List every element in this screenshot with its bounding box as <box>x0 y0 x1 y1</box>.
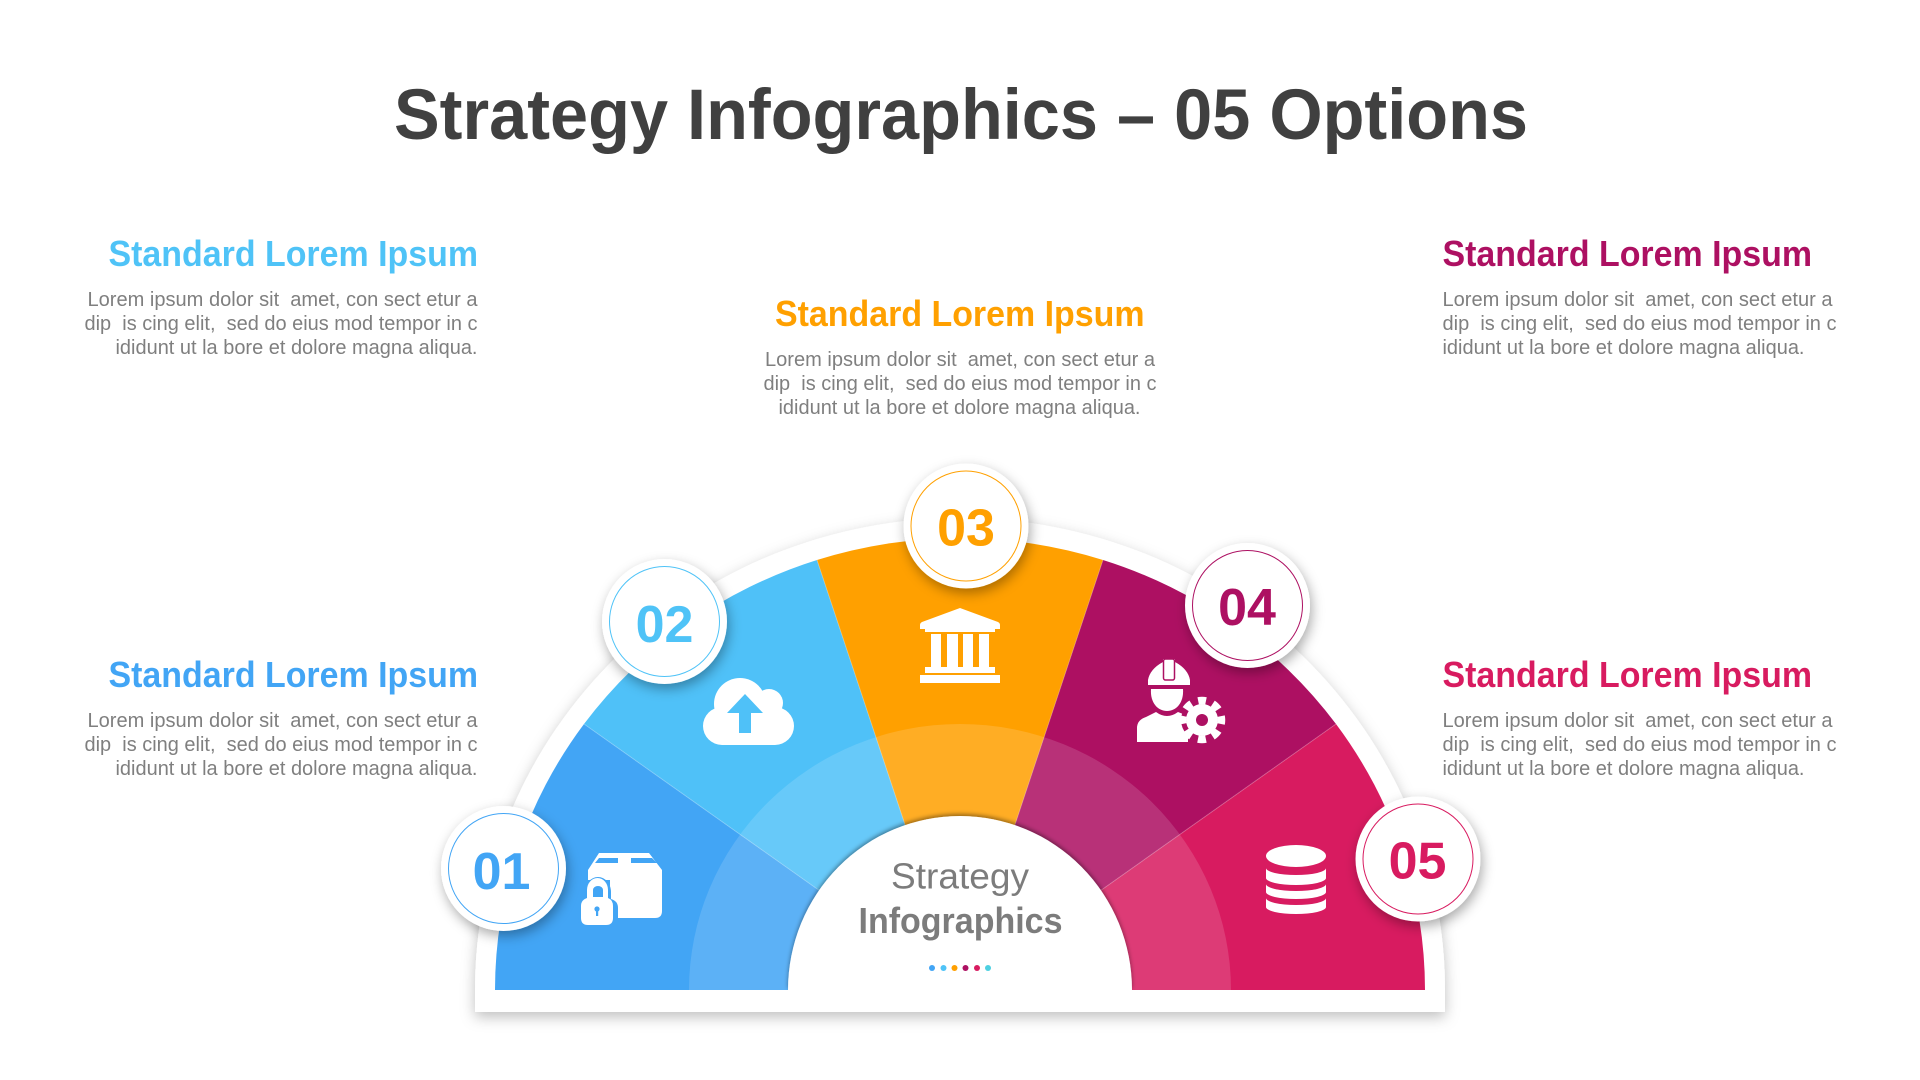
icon: bank <box>920 608 1000 683</box>
segment 05 <box>960 724 1425 990</box>
description <box>84 289 478 359</box>
description: ididunt ut la bore et dolore magna aliqua. <box>1442 337 1804 359</box>
icon: cloud upload <box>703 678 794 745</box>
description: ididunt ut la bore et dolore magna aliqua. <box>116 337 478 359</box>
number badge 03 <box>904 464 1028 588</box>
number badge 05 <box>1356 796 1480 922</box>
icon: worker with gear <box>1137 659 1223 742</box>
heading: Standard Lorem Ipsum <box>108 654 478 695</box>
center hub <box>780 816 1140 998</box>
description: dip is cing elit, sed do eius mod tempor in c <box>1442 734 1836 756</box>
description <box>1442 289 1836 359</box>
icon: database <box>1266 845 1326 914</box>
segment 03 <box>817 538 1103 990</box>
number badge 02 <box>602 559 727 684</box>
number badge 03: 03 <box>937 500 995 558</box>
description: Lorem ipsum dolor sit amet, con sect etur a <box>765 349 1156 371</box>
number badge 01 <box>441 806 566 931</box>
hub label <box>858 856 1062 941</box>
hub dots <box>929 965 991 971</box>
number badge 04: 04 <box>1218 579 1276 637</box>
description: Lorem ipsum dolor sit amet, con sect etur a <box>88 710 478 732</box>
semicircle chart <box>441 464 1480 1012</box>
text block: bottom left <box>84 654 478 780</box>
number badge 05: 05 <box>1389 832 1446 890</box>
text block: bottom right <box>1442 654 1836 780</box>
text block: top left <box>84 233 478 359</box>
number badge 01: 01 <box>473 843 530 901</box>
description <box>84 710 478 780</box>
description: Lorem ipsum dolor sit amet, con sect etur a <box>1442 710 1833 732</box>
description: Lorem ipsum dolor sit amet, con sect etur a <box>88 289 478 311</box>
segment 01 <box>495 724 960 990</box>
heading: Standard Lorem Ipsum <box>1442 654 1812 695</box>
number badge 04 <box>1185 543 1310 668</box>
number badge 02: 02 <box>636 596 693 654</box>
description: dip is cing elit, sed do eius mod tempor in c <box>1442 313 1836 335</box>
description: dip is cing elit, sed do eius mod tempor in c <box>84 313 478 335</box>
text block: center <box>764 293 1156 419</box>
description: dip is cing elit, sed do eius mod tempor in c <box>764 373 1156 395</box>
description: ididunt ut la bore et dolore magna aliqua. <box>116 758 478 780</box>
hub label: Strategy <box>891 856 1029 896</box>
segment 02 <box>584 560 960 990</box>
description: dip is cing elit, sed do eius mod tempor in c <box>84 734 478 756</box>
description <box>1442 710 1836 780</box>
description <box>764 349 1156 419</box>
hub label: Infographics <box>858 900 1062 941</box>
description: ididunt ut la bore et dolore magna aliqua. <box>778 397 1140 419</box>
heading: Standard Lorem Ipsum <box>1442 233 1812 274</box>
segment 04 <box>960 560 1336 990</box>
description: Lorem ipsum dolor sit amet, con sect etur a <box>1442 289 1833 311</box>
heading: Standard Lorem Ipsum <box>775 293 1144 334</box>
text block: top right <box>1442 233 1836 359</box>
description: ididunt ut la bore et dolore magna aliqua. <box>1442 758 1804 780</box>
white backing plate <box>475 518 1445 1012</box>
title: Strategy Infographics – 05 Options <box>394 76 1528 155</box>
heading: Standard Lorem Ipsum <box>108 233 478 274</box>
translucent inner ring <box>689 724 1231 990</box>
icon: box with lock <box>578 853 662 928</box>
